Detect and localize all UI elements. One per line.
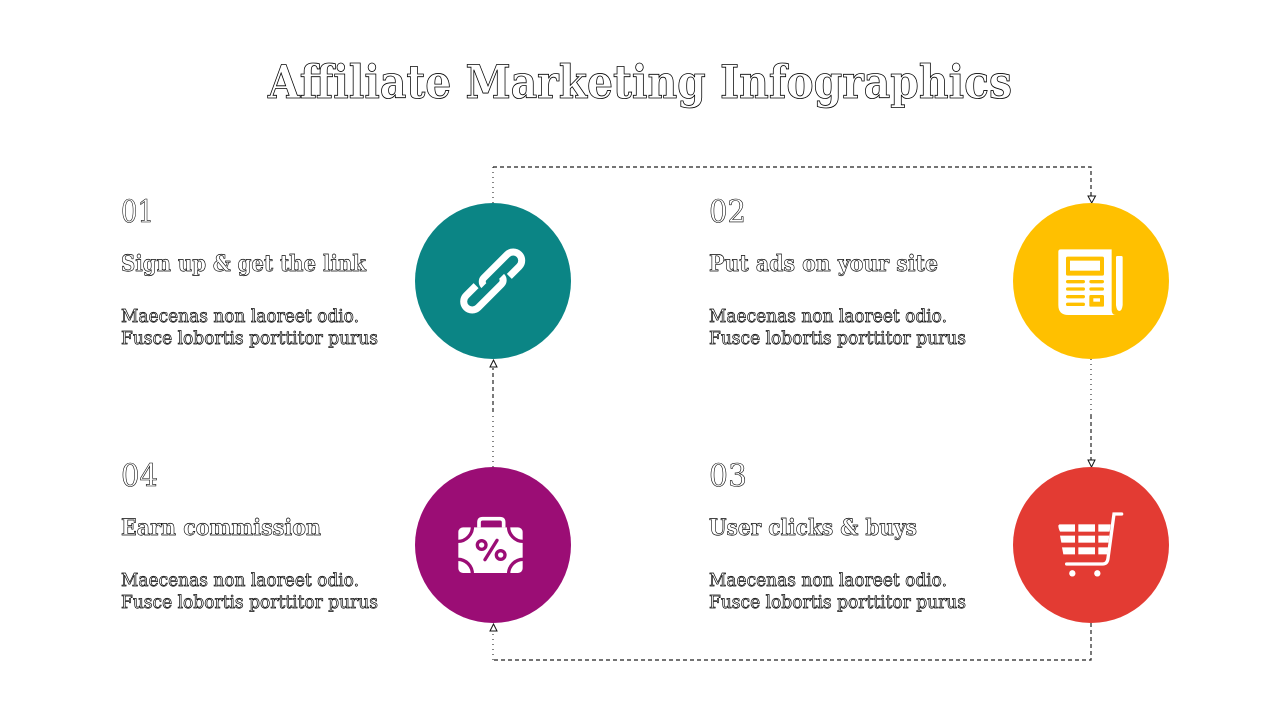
step body 04: Fusce lobortis porttitor purus xyxy=(121,593,378,613)
step number 01: 01 xyxy=(121,194,154,230)
step heading 04: Earn commission xyxy=(121,515,321,541)
step body 03 xyxy=(709,571,966,613)
panel: step 01 text xyxy=(121,194,378,349)
step body 01 xyxy=(121,307,378,349)
icon: teal circle with chain link xyxy=(415,203,571,359)
arrow: step 4 to step 1 xyxy=(490,360,497,467)
step body 02 xyxy=(709,307,966,349)
step body 03: Fusce lobortis porttitor purus xyxy=(709,593,966,613)
step body 01: Maecenas non laoreet odio. xyxy=(121,307,359,327)
step number 03: 03 xyxy=(709,458,747,494)
step number 02: 02 xyxy=(709,194,746,230)
arrow: step 3 to step 4 xyxy=(490,623,1091,660)
step body 04 xyxy=(121,571,378,613)
step number 04: 04 xyxy=(121,458,158,494)
step body 03: Maecenas non laoreet odio. xyxy=(709,571,947,591)
step heading 01: Sign up & get the link xyxy=(121,251,367,277)
step body 02: Fusce lobortis porttitor purus xyxy=(709,329,966,349)
title: Affiliate Marketing Infographics xyxy=(267,55,1012,109)
arrow: step 1 to step 2 xyxy=(493,167,1096,203)
panel: step 02 text xyxy=(709,194,966,349)
icon: red circle with shopping cart xyxy=(1013,467,1169,623)
step body 02: Maecenas non laoreet odio. xyxy=(709,307,947,327)
step body 04: Maecenas non laoreet odio. xyxy=(121,571,359,591)
icon: purple circle with percent briefcase xyxy=(415,467,571,623)
step heading 02: Put ads on your site xyxy=(709,251,938,277)
step body 01: Fusce lobortis porttitor purus xyxy=(121,329,378,349)
icon: yellow circle with newspaper xyxy=(1013,203,1169,359)
panel: step 04 text xyxy=(121,458,378,613)
panel: step 03 text xyxy=(709,458,966,613)
step heading 03: User clicks & buys xyxy=(709,515,917,541)
arrow: step 2 to step 3 xyxy=(1088,359,1095,467)
